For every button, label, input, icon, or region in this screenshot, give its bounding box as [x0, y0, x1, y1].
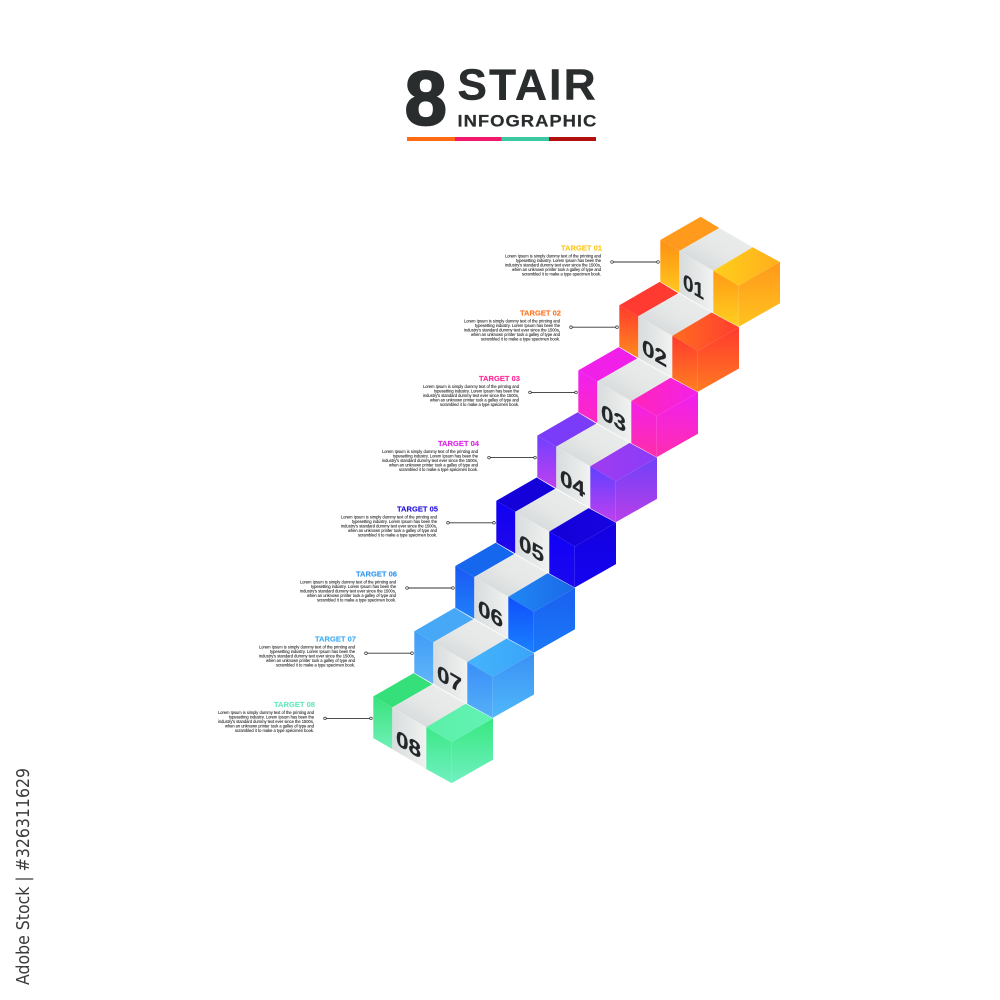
stair step 02: 02: [642, 334, 667, 372]
callout: target 03: scrambled it to make a type specimen book.: [440, 402, 519, 407]
callout: target 02: [464, 311, 618, 342]
callout: target 07: typesetting industry. Lorem Ipsum has been the: [270, 649, 355, 654]
callout: target 05: scrambled it to make a type specimen book.: [358, 532, 437, 537]
callout: target 04: TARGET 04: [438, 441, 479, 448]
stair step 04: [537, 412, 657, 522]
callout: target 07: when an unknown printer took a galley of type and: [266, 658, 355, 663]
callout: target 05: when an unknown printer took a galley of type and: [348, 528, 437, 533]
callout: target 04: industry's standard dummy text ever since the 1500s,: [382, 458, 478, 463]
callout: target 07: [259, 637, 413, 668]
stair step 04: 04: [560, 464, 585, 503]
stair step 05: 05: [519, 529, 544, 568]
callout: target 08: [218, 702, 372, 733]
stair step 01: [660, 217, 780, 327]
title word STAIR: STAIR: [458, 60, 596, 110]
callout: target 03: Lorem Ipsum is simply dummy text of the printing and: [423, 384, 519, 389]
title: [404, 56, 597, 142]
callout: target 04: [382, 441, 536, 472]
title numeral 8: 8: [404, 56, 447, 142]
callout: target 06: Lorem Ipsum is simply dummy text of the printing and: [300, 580, 396, 584]
callout: target 06: typesetting industry. Lorem Ipsum has been the: [311, 584, 396, 589]
title colour bar: [407, 137, 596, 141]
callout: target 01: [505, 246, 659, 276]
stair step 08: 08: [396, 725, 421, 764]
stair step 03: 03: [601, 399, 626, 438]
callout: target 05: typesetting industry. Lorem Ipsum has been the: [352, 519, 437, 524]
callout: target 05: TARGET 05: [397, 506, 438, 513]
callout: target 06: TARGET 06: [356, 572, 397, 578]
callout: target 02: industry's standard dummy text ever since the 1500s,: [464, 328, 560, 333]
stair step 05: [496, 478, 616, 588]
stair step 01: 01: [683, 269, 704, 305]
callout: target 08: industry's standard dummy text ever since the 1500s,: [218, 719, 314, 724]
callout: target 03: [423, 376, 577, 407]
callout: target 04: when an unknown printer took a galley of type and: [389, 463, 478, 468]
callout: target 04: scrambled it to make a type specimen book.: [399, 467, 478, 472]
callout: target 03: when an unknown printer took a galley of type and: [430, 397, 519, 402]
callout: target 04: typesetting industry. Lorem Ipsum has been the: [393, 454, 478, 459]
callout: target 01: typesetting industry. Lorem Ipsum has been the: [516, 258, 601, 263]
callout: target 07: industry's standard dummy text ever since the 1500s,: [259, 654, 355, 659]
callout: target 01: Lorem Ipsum is simply dummy text of the printing and: [505, 254, 601, 258]
stair step 07: [414, 608, 534, 718]
stair step 08: [373, 673, 493, 783]
callout: target 01: scrambled it to make a type specimen book.: [522, 272, 601, 276]
callout: target 01: when an unknown printer took a galley of type and: [512, 267, 601, 272]
stair step 07: 07: [437, 660, 462, 698]
stair step 02: [619, 282, 739, 392]
callout: target 05: industry's standard dummy text ever since the 1500s,: [341, 523, 437, 528]
callout: target 01: TARGET 01: [561, 246, 602, 252]
callout: target 01: industry's standard dummy text ever since the 1500s,: [505, 262, 601, 268]
callout: target 06: [300, 572, 454, 602]
stair step 06: [455, 543, 575, 653]
callout: target 02: when an unknown printer took a galley of type and: [471, 332, 560, 337]
callout: target 06: industry's standard dummy text ever since the 1500s,: [300, 588, 396, 594]
callout: target 02: TARGET 02: [520, 311, 561, 318]
callout: target 08: Lorem Ipsum is simply dummy text of the printing and: [218, 710, 314, 715]
callout: target 08: scrambled it to make a type specimen book.: [235, 728, 314, 733]
callout: target 02: Lorem Ipsum is simply dummy text of the printing and: [464, 319, 560, 324]
callout: target 06: scrambled it to make a type specimen book.: [317, 598, 396, 602]
callout: target 04: Lorem Ipsum is simply dummy text of the printing and: [382, 449, 478, 454]
callout: target 08: TARGET 08: [274, 702, 315, 709]
title word INFOGRAPHIC: INFOGRAPHIC: [458, 111, 597, 130]
callout: target 03: typesetting industry. Lorem Ipsum has been the: [434, 388, 519, 393]
callout: target 06: when an unknown printer took a galley of type and: [307, 593, 396, 598]
callout: target 07: TARGET 07: [315, 637, 356, 644]
callout: target 05: [341, 506, 495, 537]
callout: target 08: when an unknown printer took a galley of type and: [225, 723, 314, 728]
callout: target 05: Lorem Ipsum is simply dummy text of the printing and: [341, 514, 437, 519]
callout: target 07: scrambled it to make a type specimen book.: [276, 663, 355, 668]
callout: target 03: TARGET 03: [479, 376, 520, 383]
callout: target 07: Lorem Ipsum is simply dummy text of the printing and: [259, 645, 355, 650]
callout: target 08: typesetting industry. Lorem Ipsum has been the: [229, 714, 314, 719]
stair step 06: 06: [478, 595, 503, 633]
callout: target 02: scrambled it to make a type specimen book.: [481, 337, 560, 342]
callout: target 02: typesetting industry. Lorem Ipsum has been the: [475, 323, 560, 328]
stock credit text: Adobe Stock | #326311629: [13, 768, 34, 985]
callout: target 03: industry's standard dummy text ever since the 1500s,: [423, 393, 519, 398]
stair step 03: [578, 347, 698, 457]
